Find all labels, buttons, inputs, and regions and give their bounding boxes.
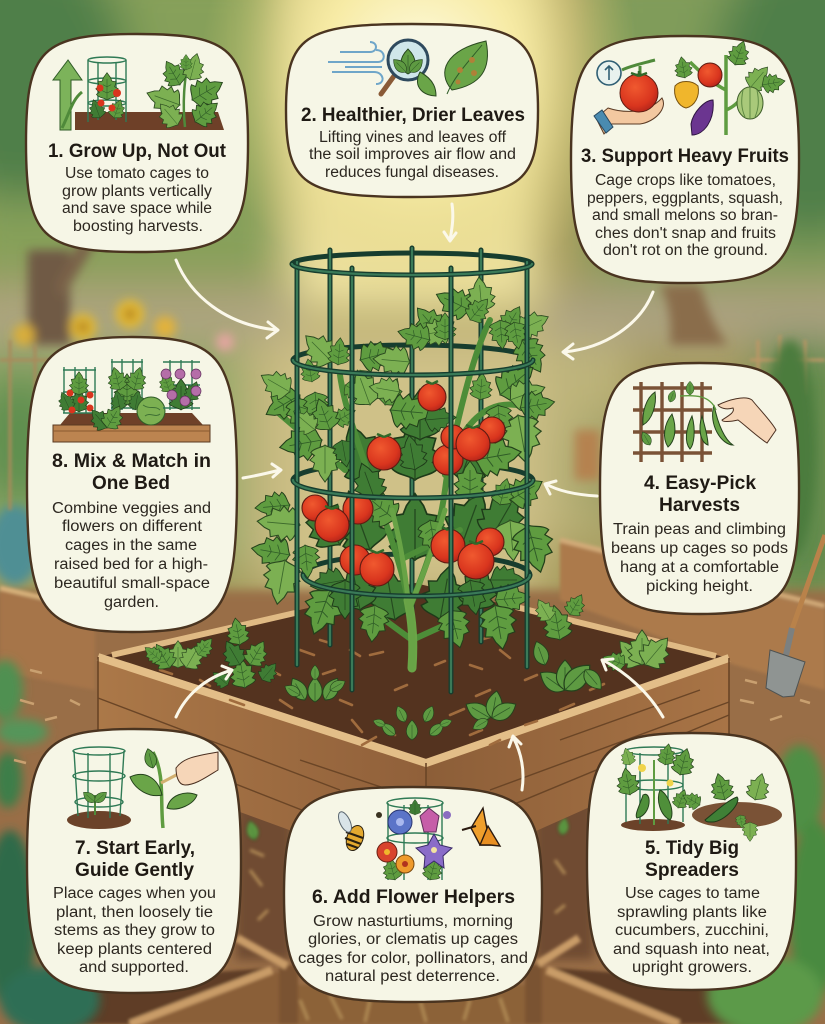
heading 7: 7. Start Early, [75,838,195,859]
body 4: picking height. [646,578,753,595]
body 5: upright growers. [632,959,752,976]
body 1: and save space while [62,200,212,217]
heading 5 [645,838,739,881]
body 6: glories, or clematis up cages [308,931,518,948]
arrow: panel 7 to bed [176,666,232,717]
arrow: panel 2 to plant [444,204,456,241]
body 2 [309,129,516,181]
panel 6: flower helpers [284,787,542,1002]
body 3: don't rot on the ground. [603,242,768,259]
body 5: and squash into neat, [613,941,770,958]
tomatoes [302,383,505,586]
heading 6: 6. Add Flower Helpers [312,887,515,908]
body 5: sprawling plants like [617,904,767,921]
heading 5: Spreaders [645,860,739,881]
body 8: garden. [104,594,159,611]
body 8: cages in the same [65,537,197,554]
arrow: panel 8 to plant [243,464,281,478]
icon: trellis with pea pods and hand [633,381,776,462]
body 8: flowers on different [62,518,203,535]
body 1: Use tomato cages to [65,165,209,182]
body 7: Place cages when you [53,885,216,902]
heading 8: 8. Mix & Match in [52,451,211,472]
panel 5: tidy spreaders [587,733,796,990]
shovel [766,535,825,697]
body 2: the soil improves air flow and [309,146,516,163]
body 3: ches don't snap and fruits [595,225,776,242]
body 3: and small melons so bran- [592,207,778,224]
body 5: cucumbers, zucchini, [615,922,769,939]
panel 4: easy pick [600,363,799,614]
heading 3: 3. Support Heavy Fruits [581,146,789,167]
body 1: boosting harvests. [73,218,203,235]
panel 1: grow up [26,34,248,252]
icon: cucumbers in cage and sprawling zucchini [614,742,782,842]
body 5 [613,885,770,976]
icon: upward arrow, cage and plant [53,51,230,132]
body 8: beautiful small-space [54,575,210,592]
heading 7: Guide Gently [75,860,194,881]
tomato cage: back [292,248,533,645]
body 6: natural pest deterrence. [325,968,500,985]
body 7: keep plants centered [57,941,212,958]
body 7 [53,885,216,976]
tomato plant [249,276,560,668]
body 1: grow plants vertically [62,183,212,200]
body 4 [611,521,788,595]
heading 2: 2. Healthier, Drier Leaves [301,105,525,126]
heading 4 [644,473,756,516]
heading 1: 1. Grow Up, Not Out [48,141,227,162]
heading 8: One Bed [92,473,170,494]
body 5: Use cages to tame [625,885,760,902]
body 1 [62,165,212,235]
body 7: and supported. [79,959,189,976]
body 2: Lifting vines and leaves off [319,129,507,146]
panel 2: healthier leaves [286,24,538,197]
body 7: stems as they grow to [54,922,215,939]
body 8 [52,500,211,611]
body 3 [587,172,783,259]
body 6: Grow nasturtiums, morning [313,913,513,930]
body 4: Train peas and climbing [613,521,786,538]
heading 7 [75,838,195,881]
body 7: plant, then loosely tie [56,904,213,921]
body 4: hang at a comfortable [620,559,779,576]
body 6 [298,913,528,985]
body 3: Cage crops like tomatoes, [595,172,776,189]
icon: wind, magnifier, spotted leaf [328,40,488,96]
heading 4: Harvests [659,495,740,516]
body 6: cages for color, pollinators, and [298,950,528,967]
tomato cage: front [292,262,533,692]
icon: flowers on cage with bee and butterfly [336,798,500,882]
panel 3: heavy fruits [571,36,799,283]
heading 8 [52,451,211,494]
body 8: Combine veggies and [52,500,211,517]
body 3: peppers, eggplants, squash, [587,190,783,207]
arrow: panel 6 to bed [509,736,523,790]
arrow: panel 1 to plant [176,260,278,338]
heading 5: 5. Tidy Big [645,838,739,859]
small companion plants in bed [140,590,679,740]
raised garden bed [98,583,729,880]
icon: young plant in cage, tied stem and hand [67,747,218,829]
body 4: beans up cages so pods [611,540,788,557]
arrow: panel 5 to plant [602,659,663,717]
arrow: panel 3 to plant [563,292,653,359]
icon: raised bed with three cages [53,359,210,442]
body 2: reduces fungal diseases. [325,164,499,181]
panel 8: mix and match [27,337,237,632]
plant stems [275,320,535,668]
arrow: panel 4 to plant [545,481,597,496]
panel 7: start early [27,729,241,993]
icon: hand with tomato and fruiting plant [594,38,787,135]
body 8: raised bed for a high- [54,556,208,573]
heading 4: 4. Easy-Pick [644,473,756,494]
